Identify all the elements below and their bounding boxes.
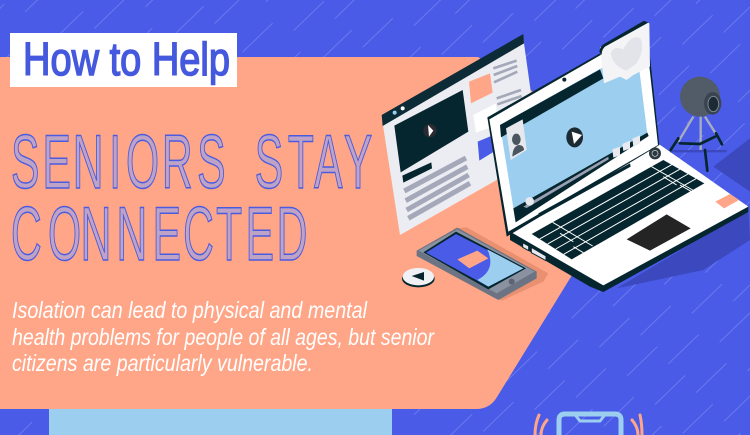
laptop lid [487,25,659,237]
title line 1: SENIORS [11,120,226,205]
laptop screen [500,48,647,222]
video call avatar [506,119,527,160]
illustration: devices [382,21,750,301]
smartphone [417,227,548,301]
play coin [402,268,435,287]
title line 2: CONNECTED [11,192,307,277]
intro paragraph [12,297,435,376]
touchpad [627,214,691,251]
laptop base [510,145,748,292]
intro paragraph: Isolation can lead to physical and mental [12,297,368,323]
phone camera icon [457,251,488,268]
ports [523,243,546,261]
title line 1: STAY [255,120,372,205]
browser window [382,34,533,235]
speaker bar [538,163,631,217]
intro paragraph: citizens are particularly vulnerable. [12,350,313,376]
keyboard [532,160,704,259]
heading label: How to Help: How to Help [23,33,230,85]
webcam on tripod [670,77,727,171]
laptop [487,25,748,292]
peach sticker [715,194,739,208]
browser video [394,90,468,172]
screen play button [566,127,583,147]
title: Seniors Stay Connected [11,120,372,277]
icon: phone with signal waves [535,414,642,435]
panel: light blue section below [49,409,392,435]
intro paragraph: health problems for people of all ages, but senior [12,324,435,350]
panel: peach hero [0,57,610,409]
title line 1 [11,120,372,205]
heart notification [599,21,650,83]
illustration shadows [617,138,750,288]
